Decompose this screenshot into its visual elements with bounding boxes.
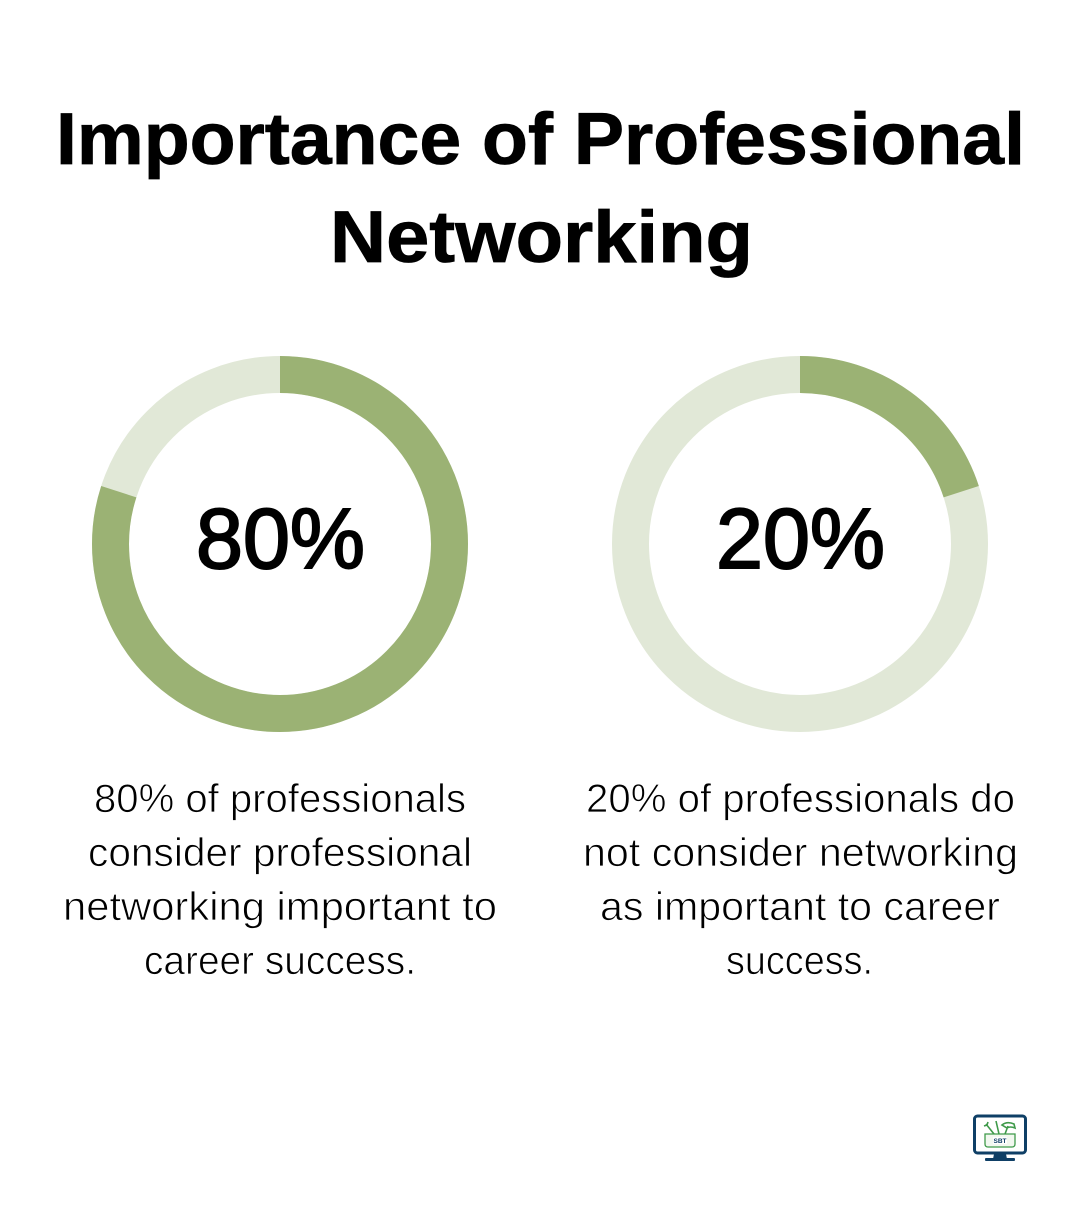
text block: 80% description <box>63 777 497 983</box>
title: Importance of Professional <box>56 99 1025 180</box>
text block: 20% description: not consider networking <box>583 831 1018 875</box>
text block: 80% description: networking important to <box>63 885 497 929</box>
text block: 80% description: career success. <box>144 939 416 983</box>
title: Networking <box>330 197 753 278</box>
text block: 20% description <box>583 777 1018 983</box>
icon: monitor with toolbox logo: SBT <box>994 1138 1007 1145</box>
donut chart: 80% <box>110 374 450 714</box>
text block: 80% description: consider professional <box>88 831 472 875</box>
text block: 80% description: 80% of professionals <box>94 777 466 821</box>
donut chart: 80%: 80% <box>196 492 365 587</box>
text block: 20% description: success. <box>726 939 873 983</box>
icon: monitor with toolbox logo <box>974 1116 1026 1161</box>
donut chart: 20%: 20% <box>716 492 885 587</box>
title <box>56 99 1025 278</box>
text block: 20% description: as important to career <box>600 885 1000 929</box>
donut chart: 20% <box>630 374 970 714</box>
text block: 20% description: 20% of professionals do <box>586 777 1015 821</box>
